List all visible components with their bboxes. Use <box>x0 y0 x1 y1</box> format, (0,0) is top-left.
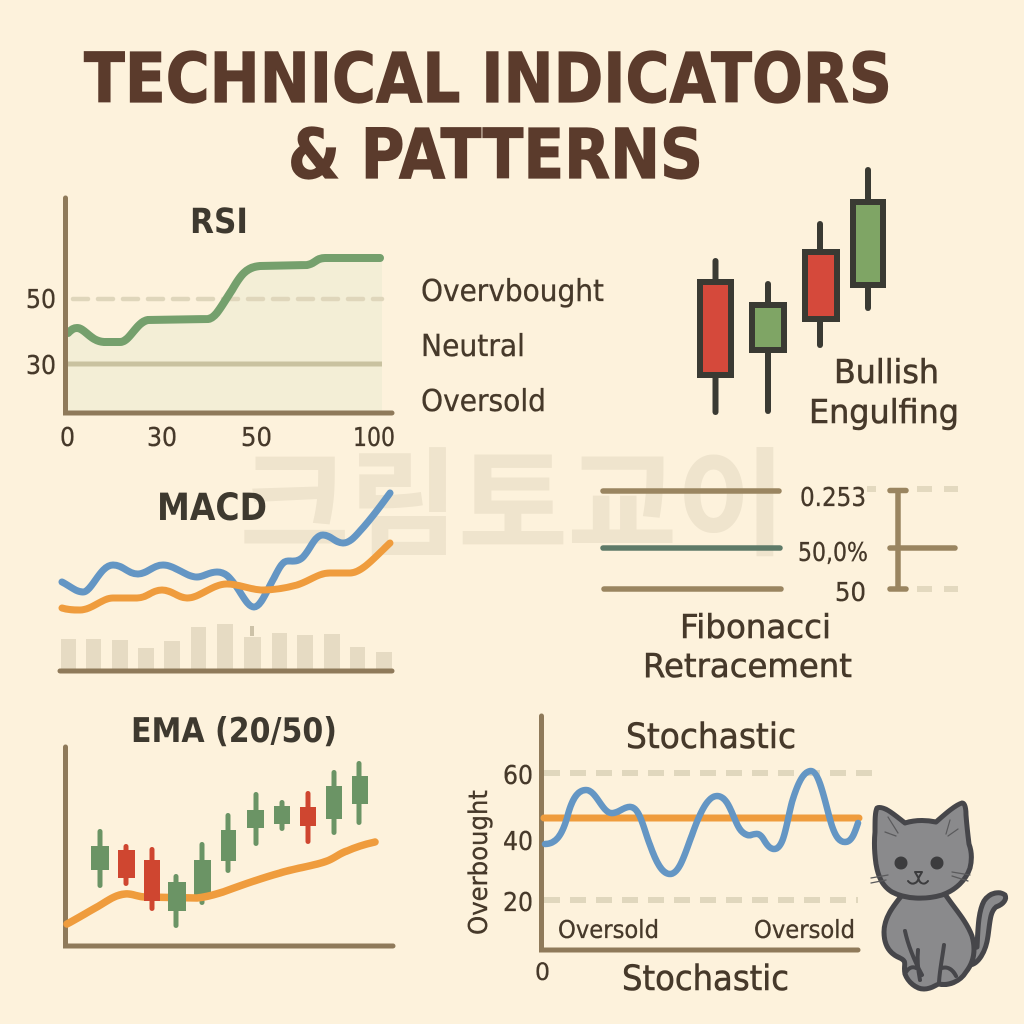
Fibonacci values <box>798 483 868 608</box>
Bullish Engulfing label: Engulfing <box>809 392 959 431</box>
panel: EMA <box>66 711 393 946</box>
RSI 30 level <box>68 362 382 366</box>
Stochastic x label: Stochastic <box>622 959 789 999</box>
RSI axis labels: 30 <box>26 351 56 381</box>
candle 2 <box>752 284 784 411</box>
Oversold labels: Oversold <box>558 915 659 944</box>
EMA red candles <box>118 791 316 911</box>
RSI zone labels: Oversold <box>421 384 546 419</box>
RSI axis labels: 0 <box>60 423 75 453</box>
Oversold labels: Oversold <box>754 915 855 944</box>
cat mouth <box>908 872 928 884</box>
RSI zone labels: Neutral <box>421 329 525 364</box>
Stochastic y labels: 60 <box>503 761 533 791</box>
Stochastic axes <box>542 716 858 950</box>
Fibonacci Retracement label: Fibonacci <box>680 607 831 646</box>
EMA heading: EMA (20/50) <box>131 711 337 751</box>
Overbought axis label: Overbought <box>464 790 494 935</box>
Fibonacci values: 0.253 <box>800 483 866 513</box>
cat tail <box>968 893 1006 965</box>
MACD baseline <box>60 668 392 674</box>
cat whiskers and ear lines <box>871 817 970 883</box>
MACD heading: MACD <box>157 486 267 529</box>
EMA green candles <box>91 761 368 928</box>
Fibonacci values: 50,0% <box>798 538 868 568</box>
Fibonacci Retracement label <box>643 607 852 685</box>
candle 3 <box>805 224 837 345</box>
Bullish Engulfing label <box>809 352 959 431</box>
cat eyes <box>894 856 908 870</box>
icon: grey cat <box>871 803 1006 989</box>
MACD blue line <box>62 493 390 607</box>
panel: Stochastic <box>464 716 876 999</box>
cat head <box>874 803 971 898</box>
EMA candle under line <box>194 842 211 905</box>
panel: MACD <box>60 486 392 671</box>
panel: Bullish Engulfing <box>700 170 959 431</box>
Bullish Engulfing label: Bullish <box>834 352 939 391</box>
RSI axis labels <box>26 285 395 453</box>
RSI shaded area <box>68 258 382 412</box>
Oversold labels <box>558 915 855 944</box>
panel: RSI <box>26 198 604 453</box>
Stochastic blue line <box>545 771 858 874</box>
RSI axes <box>66 198 392 413</box>
EMA orange line <box>67 842 375 924</box>
watermark: 크림토교이 <box>240 411 786 579</box>
Stochastic orange line <box>544 814 859 822</box>
Fibonacci Retracement label: Retracement <box>643 646 852 685</box>
title: TECHNICAL INDICATORS <box>84 39 892 119</box>
RSI line <box>68 258 380 342</box>
candle 4 <box>853 170 883 308</box>
RSI zone labels: Overvbought <box>421 274 604 309</box>
panel: Fibonacci Retracement <box>603 483 958 685</box>
Fibonacci values: 50 <box>835 578 866 608</box>
RSI axis labels: 100 <box>353 423 395 453</box>
zero label: 0 <box>535 958 550 986</box>
Stochastic y labels <box>503 761 533 918</box>
title: & PATTERNS <box>288 115 703 195</box>
Fibonacci dashed ticks <box>867 489 958 589</box>
Stochastic heading: Stochastic <box>626 717 796 757</box>
candle 1 <box>700 261 731 412</box>
RSI dashed level <box>73 297 382 301</box>
RSI heading: RSI <box>190 202 248 242</box>
EMA axes <box>66 747 393 946</box>
Fibonacci bracket <box>890 490 955 589</box>
Stochastic y labels: 20 <box>503 888 533 918</box>
Stochastic dashed levels <box>544 773 876 900</box>
RSI axis labels: 50 <box>26 285 56 315</box>
cat body <box>884 894 974 989</box>
RSI axis labels: 50 <box>241 423 272 453</box>
cat legs <box>905 931 956 984</box>
title <box>84 39 892 195</box>
Stochastic y labels: 40 <box>503 827 533 857</box>
MACD histogram <box>61 624 392 669</box>
RSI zone labels <box>421 274 604 419</box>
Fibonacci levels <box>603 491 781 589</box>
RSI axis labels: 30 <box>147 423 177 453</box>
MACD orange line <box>62 543 390 610</box>
